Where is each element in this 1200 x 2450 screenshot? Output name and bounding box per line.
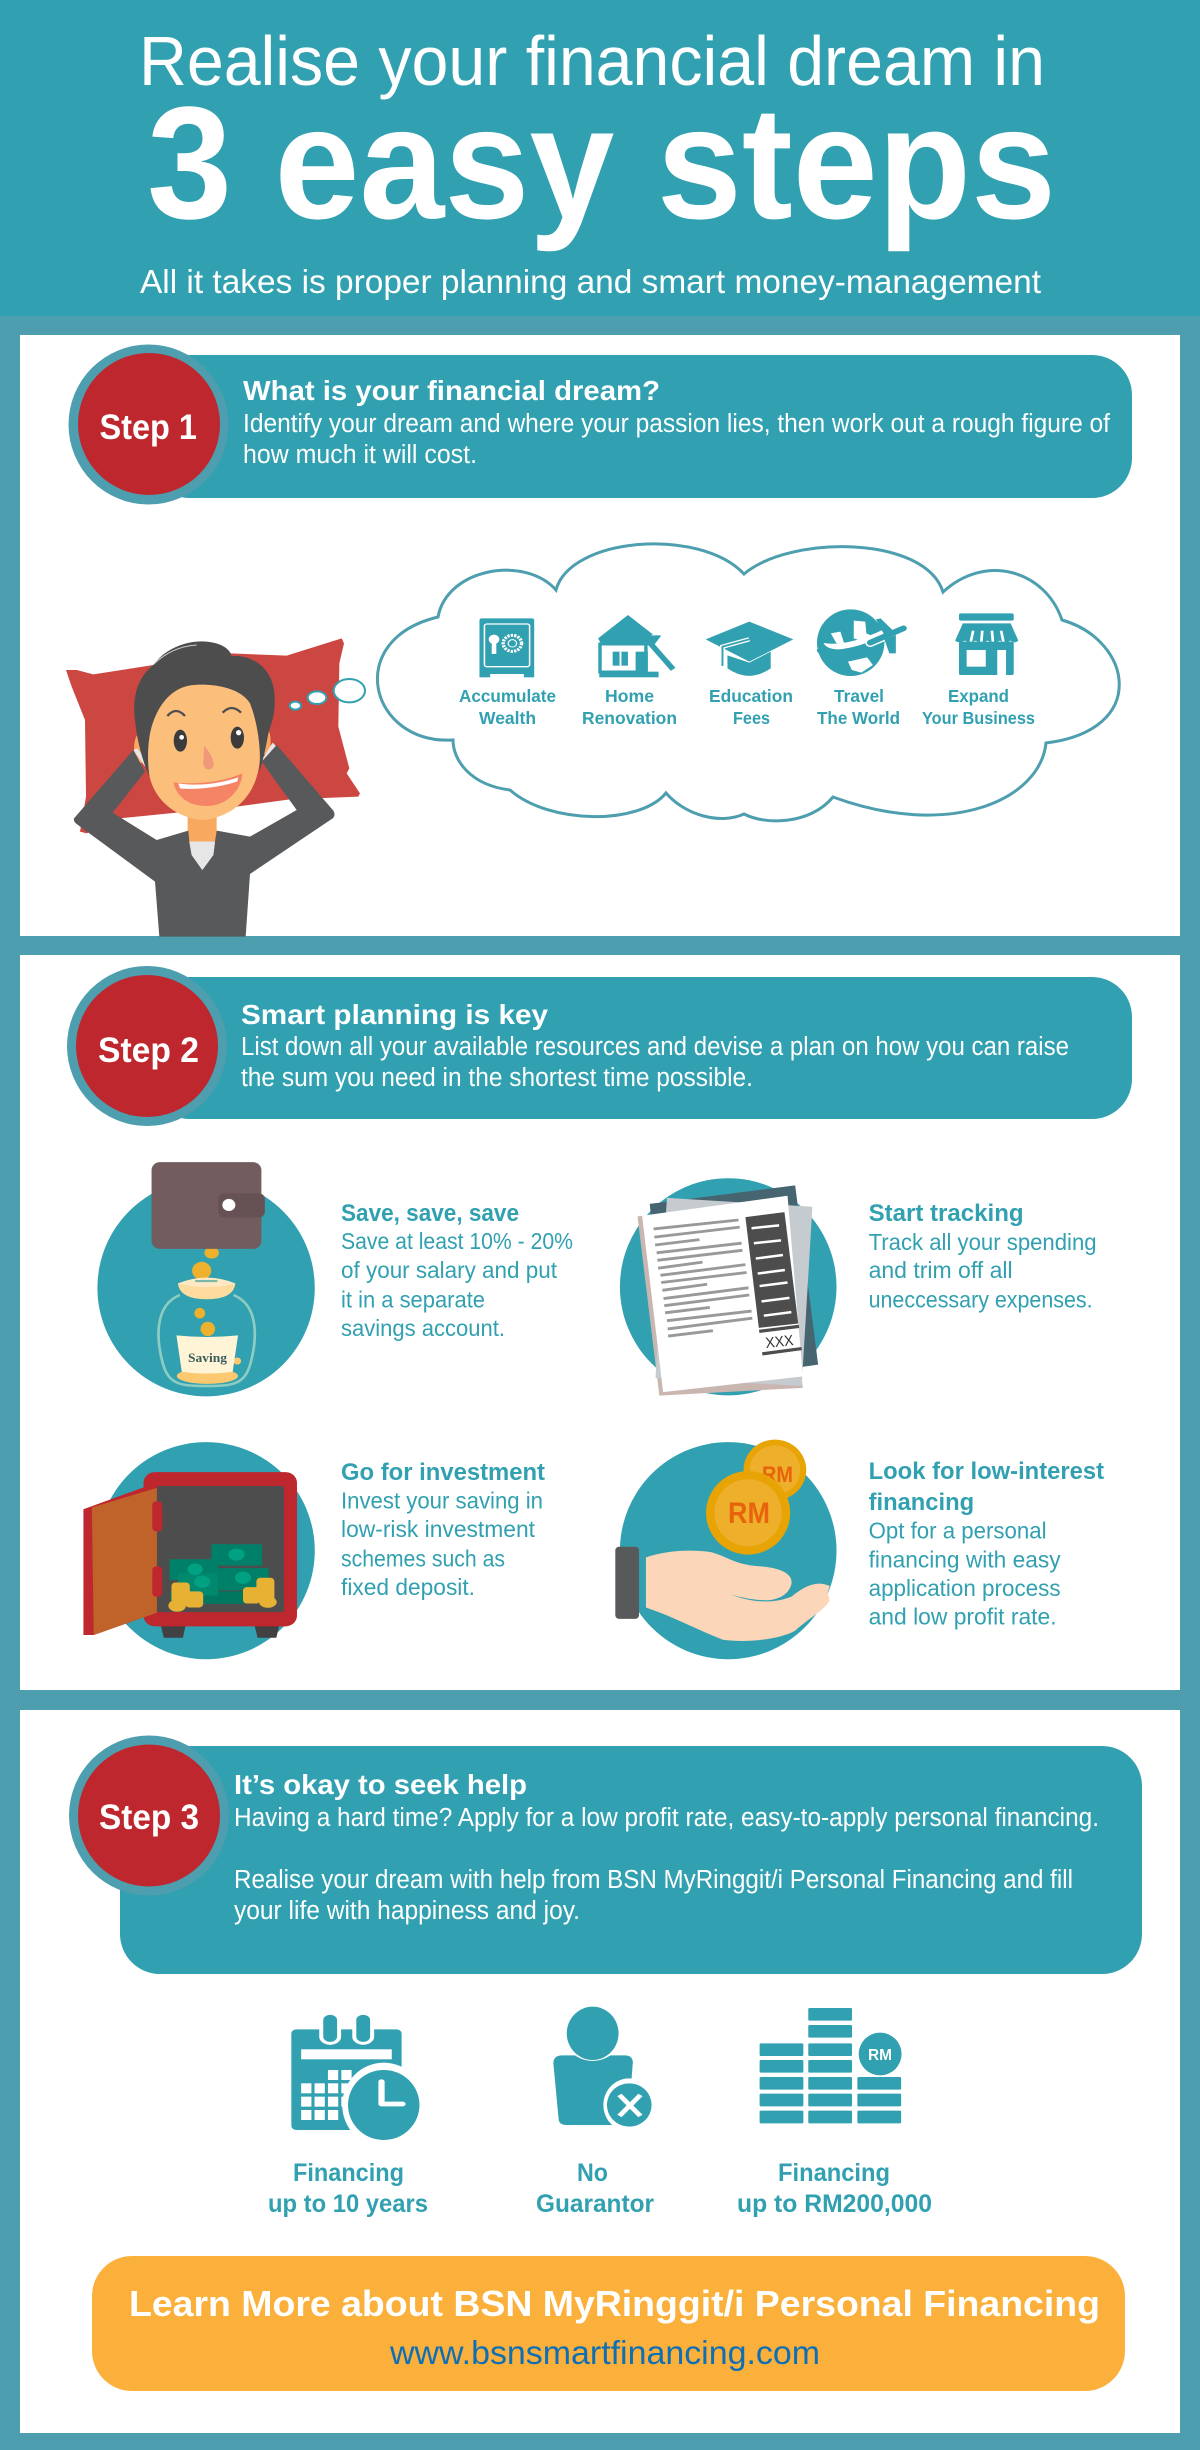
neck: [188, 815, 217, 842]
dream labels: Wealth: [479, 708, 536, 728]
document total text: XXX: [765, 1332, 794, 1352]
cuff: [615, 1547, 639, 1619]
cuffs: [133, 748, 147, 767]
icon: store front: [955, 613, 1018, 675]
item: start tracking: and trim off all: [869, 1257, 1013, 1283]
item: look for low-interest financing: financing: [869, 1489, 974, 1516]
dream labels: Renovation: [582, 708, 677, 728]
item: go for investment: fixed deposit.: [341, 1574, 475, 1600]
item: look for low-interest financing: and low profit rate.: [869, 1604, 1057, 1630]
coin pile: [177, 1368, 238, 1384]
mouth: [173, 773, 242, 806]
website url: www.bsnsmartfinancing.com: [389, 2334, 820, 2371]
item: go for investment: schemes such as: [341, 1546, 505, 1572]
step 3 body text: Having a hard time? Apply for a low profit rate, easy-to-apply personal financing.: [234, 1804, 1099, 1832]
shirt: [189, 842, 215, 870]
icon: house and hammer: [598, 615, 673, 677]
pillow: [66, 638, 360, 833]
illustration: man dreaming on pillow: [66, 638, 360, 937]
eyebrows: [167, 711, 185, 716]
step 3 badge: Step 3: [99, 1798, 199, 1837]
item: look for low-interest financing: financing with easy: [869, 1546, 1061, 1572]
step 1 banner: [150, 355, 1132, 498]
step 3 body text: your life with happiness and joy.: [234, 1897, 580, 1925]
item: save, save, save: of your salary and put: [341, 1257, 558, 1283]
item: look for low-interest financing: [869, 1458, 1104, 1630]
suit: [74, 745, 335, 937]
coins: [192, 1262, 211, 1280]
illustration: safe with money: [83, 1442, 315, 1659]
dream labels: The World: [817, 708, 900, 728]
title line 2: 3 easy steps: [147, 73, 1056, 252]
label: financing up to 10 years: Financing: [293, 2159, 404, 2187]
hand: [646, 1551, 830, 1641]
label: financing up to RM200,000: Financing: [778, 2159, 890, 2187]
label: no guarantor: [536, 2159, 654, 2218]
dream labels: Travel: [834, 686, 884, 706]
label: no guarantor: Guarantor: [536, 2190, 654, 2218]
step 2 body text: [241, 1033, 1069, 1092]
item: save, save, save: savings account.: [341, 1315, 505, 1341]
dream labels: Fees: [733, 708, 770, 728]
item: start tracking: Track all your spending: [869, 1229, 1097, 1255]
step 2 heading: Smart planning is key: [241, 999, 548, 1030]
step 2 badge: Step 2: [98, 1031, 199, 1070]
dark table column: [745, 1212, 798, 1328]
label: no guarantor: No: [577, 2159, 608, 2187]
text lines: [654, 1220, 752, 1336]
dream labels: Accumulate: [459, 686, 556, 706]
coin falling from wallet: [204, 1247, 219, 1259]
item: start tracking: Start tracking: [869, 1200, 1024, 1227]
icon: globe and plane: [817, 609, 903, 676]
illustration: hand with coins: RM: [728, 1497, 770, 1530]
header banner: [0, 0, 1200, 316]
item: look for low-interest financing: application process: [869, 1575, 1061, 1601]
call to action heading: Learn More about BSN MyRinggit/i Personal Financing: [129, 2283, 1100, 2324]
back coin: [744, 1440, 806, 1500]
icon: calendar and clock: [291, 2013, 425, 2147]
step 1 badge: Step 1: [100, 408, 197, 447]
step 2 banner: [150, 977, 1132, 1119]
label: financing up to 10 years: [268, 2159, 428, 2218]
dream labels: Education: [709, 686, 793, 706]
item: save, save, save: it in a separate: [341, 1286, 485, 1312]
thought cloud: [377, 544, 1119, 821]
thought bubbles: [290, 679, 365, 710]
step 2 body text: the sum you need in the shortest time possible.: [241, 1064, 753, 1092]
eyes: [174, 730, 187, 752]
item: go for investment: [341, 1459, 545, 1600]
icon: stacks of money: RM: [868, 2047, 892, 2064]
safe door: [83, 1486, 157, 1635]
icon: graduation cap: [706, 622, 793, 676]
item: start tracking: uneccessary expenses.: [869, 1286, 1093, 1312]
step 3 body text: [234, 1804, 1099, 1925]
step 3 body text: Realise your dream with help from BSN MyRinggit/i Personal Financing and fill: [234, 1866, 1073, 1894]
hair highlight: [154, 645, 197, 664]
shirt front: [189, 842, 215, 870]
label: [176, 1335, 238, 1374]
step 3 heading: It’s okay to seek help: [234, 1769, 527, 1800]
call to action button: [92, 2256, 1125, 2391]
panel: step 3: [20, 1710, 1180, 2433]
title line 1: Realise your financial dream in: [139, 22, 1045, 100]
item: go for investment: Go for investment: [341, 1459, 545, 1486]
illustration: wallet and saving jar: [97, 1162, 315, 1396]
item: save, save, save: Save, save, save: [341, 1200, 519, 1227]
dream labels: Your Business: [922, 708, 1035, 728]
dream labels: Expand: [948, 686, 1009, 706]
label: financing up to 10 years: up to 10 years: [268, 2190, 428, 2218]
wallet: [152, 1162, 261, 1249]
dream labels: [459, 686, 1035, 728]
ears: [134, 733, 146, 763]
step 1 body text: how much it will cost.: [243, 441, 477, 469]
icon: safe: [479, 618, 534, 677]
item: start tracking: [869, 1200, 1097, 1312]
step 1 heading: What is your financial dream?: [243, 375, 660, 406]
nose: [203, 746, 214, 770]
step 2 body text: List down all your available resources and devise a plan on how you can raise: [241, 1033, 1069, 1061]
jar: [159, 1295, 255, 1386]
face: [148, 683, 260, 820]
panel: step 1: [20, 335, 1180, 937]
label: financing up to RM200,000: up to RM200,000: [737, 2190, 932, 2218]
item: go for investment: Invest your saving in: [341, 1488, 543, 1514]
banknotes: [170, 1544, 269, 1604]
step 3 badge: [69, 1736, 229, 1896]
icon: no guarantor: [553, 2007, 655, 2132]
step 1 body text: [243, 410, 1111, 469]
coin stacks: [168, 1578, 277, 1612]
subtitle: All it takes is proper planning and smart money-management: [140, 263, 1041, 300]
step 1 body text: Identify your dream and where your passion lies, then work out a rough figure of: [243, 410, 1111, 438]
item: look for low-interest financing: Opt for a personal: [869, 1518, 1047, 1544]
step 1 badge: [68, 344, 228, 504]
step 2 badge: [67, 966, 227, 1126]
step 3 banner: [120, 1746, 1142, 1974]
front coin: [706, 1471, 790, 1555]
dream labels: Home: [605, 686, 654, 706]
illustration: hand with coins: RM: [762, 1462, 793, 1487]
illustration: hand with coins: [615, 1440, 837, 1659]
panel: step 2: [20, 955, 1180, 1690]
label: financing up to RM200,000: [737, 2159, 932, 2218]
feet: [161, 1625, 186, 1638]
icon: stacks of money: [760, 2008, 902, 2123]
hair: [134, 641, 275, 777]
safe body: [144, 1472, 297, 1626]
item: save, save, save: [341, 1200, 573, 1341]
item: go for investment: low-risk investment: [341, 1516, 536, 1542]
item: look for low-interest financing: Look for low-interest: [869, 1458, 1104, 1485]
illustration: documents: [620, 1178, 837, 1396]
jar label text: Saving: [188, 1350, 228, 1365]
item: save, save, save: Save at least 10% - 20%: [341, 1228, 573, 1254]
